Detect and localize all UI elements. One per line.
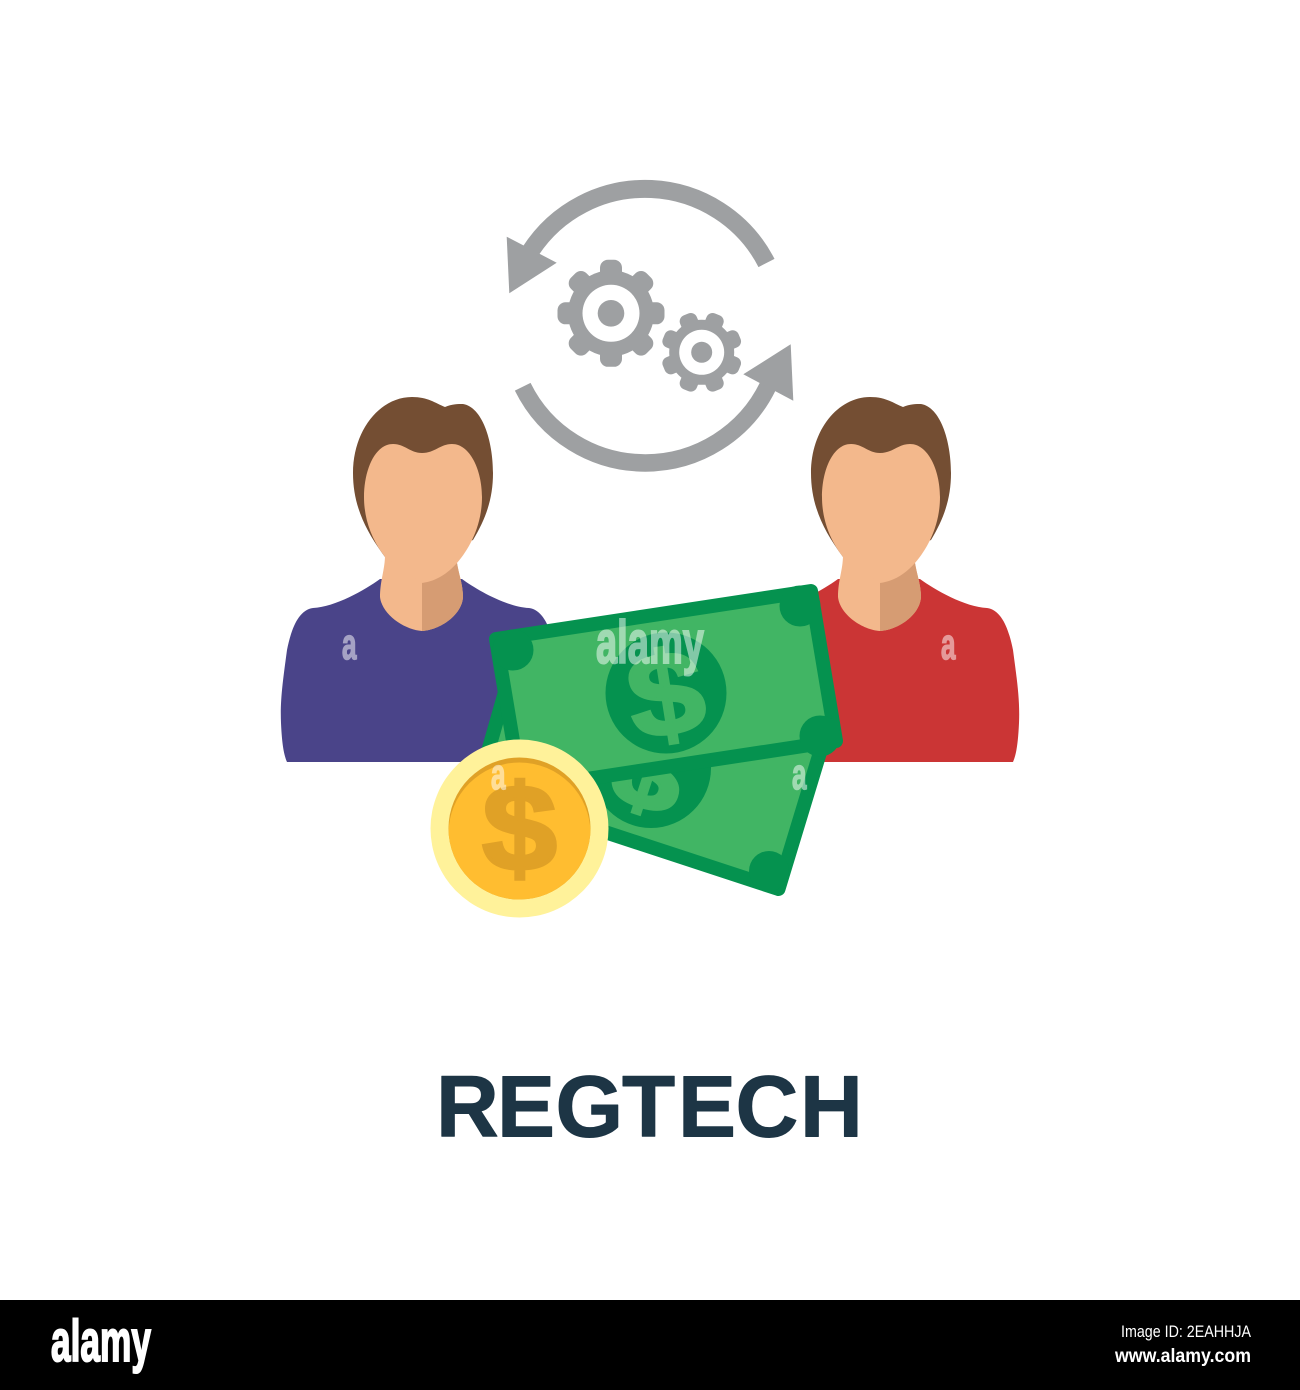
banknote: front: [492, 586, 840, 789]
icon: large gear: [558, 260, 664, 367]
watermark: alamy: a: [941, 620, 956, 669]
top arrow: [507, 189, 766, 293]
coin: [430, 740, 608, 918]
person: right, red shirt: [739, 397, 1019, 762]
title: REGTECH: [436, 1058, 863, 1156]
watermark: alamy: [342, 609, 956, 799]
banknote: front: $: [618, 623, 713, 765]
banknote: back: $: [594, 694, 707, 843]
footer bar: [0, 1300, 1300, 1390]
website: www.alamy.com: [1114, 1346, 1251, 1367]
watermark: alamy: a: [342, 620, 357, 669]
watermark: alamy: a: [792, 750, 807, 799]
icon: small gear: [660, 311, 743, 394]
watermark: alamy: a: [491, 750, 506, 799]
image id: Image ID: 2EAHHJA: [1121, 1322, 1252, 1341]
bottom arrow: [523, 344, 793, 463]
watermark: alamy: alamy: [596, 609, 704, 676]
person: left, blue shirt: [281, 397, 561, 762]
coin: $: [482, 761, 557, 897]
banknote: back: [477, 636, 825, 891]
icon: circular process arrows: [507, 189, 793, 463]
footer logo: alamy: [51, 1309, 151, 1374]
